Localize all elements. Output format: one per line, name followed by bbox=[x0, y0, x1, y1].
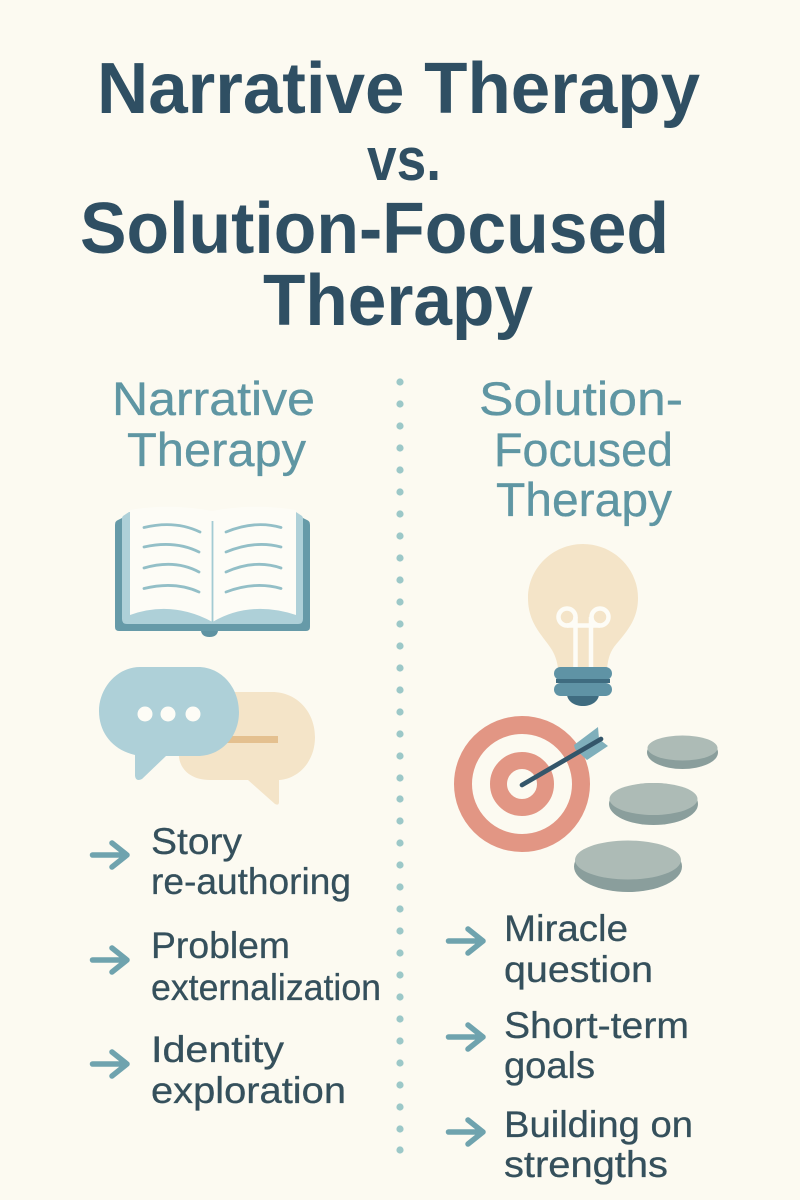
title: Narrative Therapy bbox=[97, 49, 700, 129]
list: narrative therapy bbox=[92, 821, 381, 1111]
title bbox=[80, 49, 700, 341]
heading: Solution-Focused Therapy: Therapy bbox=[496, 473, 673, 526]
list item: Building on strengths: strengths bbox=[504, 1144, 668, 1185]
dotted divider bbox=[396, 378, 404, 1154]
icon: target with arrow bbox=[463, 725, 608, 843]
icon: open book bbox=[115, 507, 310, 637]
blue bubble bbox=[99, 667, 239, 780]
list item: Identity exploration bbox=[92, 1029, 346, 1111]
list item: Building on strengths: Building on bbox=[504, 1104, 693, 1145]
list item: Identity exploration: Identity bbox=[151, 1029, 285, 1070]
list item: Identity exploration: exploration bbox=[151, 1070, 346, 1111]
title: Therapy bbox=[263, 261, 533, 341]
title: Solution-Focused bbox=[80, 189, 669, 269]
list item: Short-term goals: goals bbox=[504, 1045, 595, 1086]
title: vs. bbox=[367, 126, 441, 193]
beige bubble bbox=[179, 692, 315, 805]
list item: Building on strengths bbox=[448, 1104, 693, 1185]
list item: Story re-authoring bbox=[92, 821, 351, 902]
icon: light bulb bbox=[528, 544, 638, 706]
bubble dots bbox=[138, 706, 200, 722]
list item: Miracle question bbox=[448, 908, 653, 990]
list item: Short-term goals: Short-term bbox=[504, 1005, 689, 1046]
heading: Narrative Therapy bbox=[112, 372, 315, 476]
list item: Miracle question: Miracle bbox=[504, 908, 628, 949]
list item: Problem externalization: Problem bbox=[151, 925, 290, 966]
heading: Solution-Focused Therapy bbox=[479, 372, 683, 526]
list item: Miracle question: question bbox=[504, 949, 653, 990]
beige bubble bar bbox=[225, 736, 278, 743]
list item: Problem externalization: externalization bbox=[151, 967, 381, 1008]
heading: Narrative Therapy: Therapy bbox=[127, 423, 307, 476]
heading: Narrative Therapy: Narrative bbox=[112, 372, 315, 425]
list item: Problem externalization bbox=[92, 925, 381, 1008]
icon: stepping stones bbox=[574, 736, 718, 892]
heading: Solution-Focused Therapy: Focused bbox=[494, 423, 673, 476]
list item: Short-term goals bbox=[448, 1005, 689, 1086]
icon: speech bubbles bbox=[99, 667, 315, 805]
list: solution-focused therapy bbox=[448, 908, 693, 1185]
heading: Solution-Focused Therapy: Solution- bbox=[479, 372, 683, 425]
list item: Story re-authoring: Story bbox=[151, 821, 243, 862]
list item: Story re-authoring: re-authoring bbox=[151, 861, 351, 902]
